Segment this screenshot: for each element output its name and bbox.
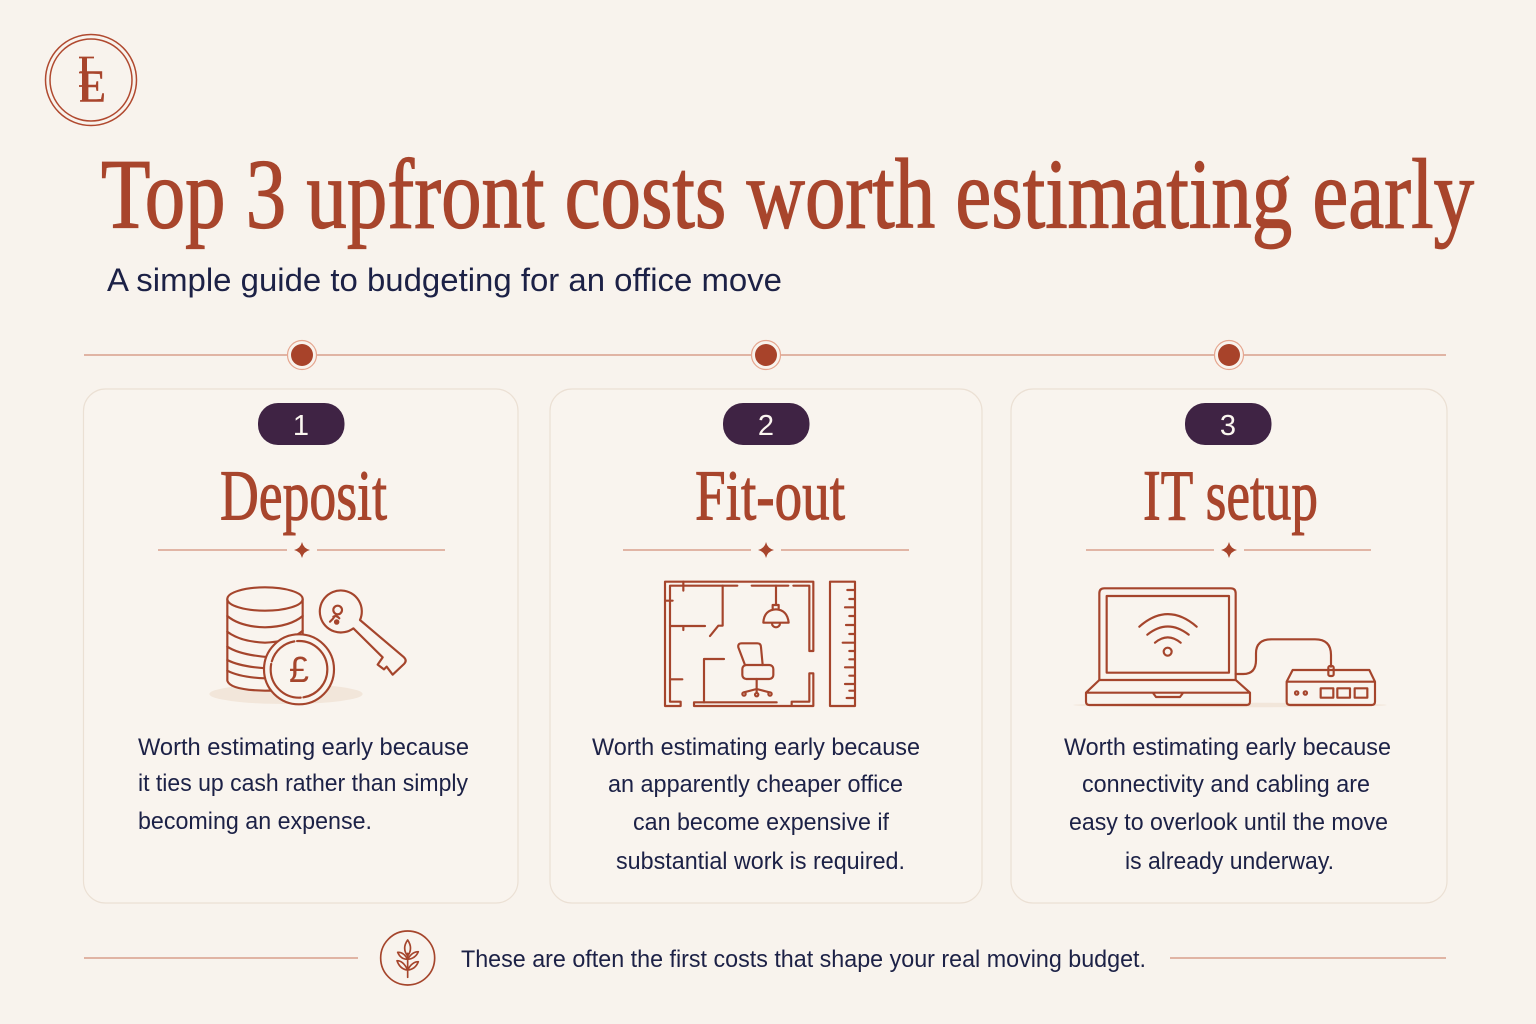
text: fit-out description: an apparently cheaper office [608, 771, 903, 798]
icon: leaf badge [381, 931, 435, 985]
heading: deposit: Deposit [220, 456, 387, 536]
text: deposit description: becoming an expense. [138, 808, 372, 835]
number badge 1: 1 [293, 410, 309, 442]
logo: E [79, 62, 106, 112]
text: fit-out description: can become expensive if [633, 809, 889, 836]
divider [158, 542, 445, 558]
icon: laptop and router [1073, 588, 1387, 707]
icon: floor plan and ruler [665, 582, 855, 706]
text: it setup description: connectivity and cabling are [1082, 771, 1370, 798]
text: deposit description [138, 734, 469, 835]
panel: it setup [1011, 389, 1447, 903]
text: fit-out description: Worth estimating early because [592, 734, 920, 761]
panel: fit-out [550, 389, 982, 903]
number badge 1 [258, 403, 344, 445]
divider [1086, 542, 1371, 558]
number badge 2 [723, 403, 810, 445]
icon: coins and key [209, 587, 406, 704]
text: deposit description: Worth estimating early because [138, 734, 469, 761]
number badge 3 [1185, 403, 1272, 445]
text: fit-out description: substantial work is required. [616, 848, 905, 875]
text: it setup description: is already underway. [1125, 848, 1334, 875]
footer rule [84, 957, 1446, 959]
icon: coins and key: £ [289, 649, 309, 690]
text: it setup description [1064, 734, 1391, 875]
number badge 2: 2 [758, 410, 774, 442]
divider [623, 542, 909, 558]
text: deposit description: it ties up cash rather than simply [138, 770, 468, 797]
footer text: These are often the first costs that shape your real moving budget. [461, 946, 1146, 973]
heading: it setup: IT setup [1143, 456, 1318, 536]
subtitle: A simple guide to budgeting for an office move [107, 262, 782, 298]
heading: fit-out: Fit-out [695, 456, 845, 536]
logo [46, 34, 136, 126]
text: it setup description: Worth estimating early because [1064, 734, 1391, 761]
number badge 3: 3 [1220, 410, 1236, 442]
text: it setup description: easy to overlook until the move [1069, 809, 1388, 836]
timeline [84, 340, 1446, 370]
panel: deposit [84, 389, 518, 903]
text: fit-out description [592, 734, 920, 875]
